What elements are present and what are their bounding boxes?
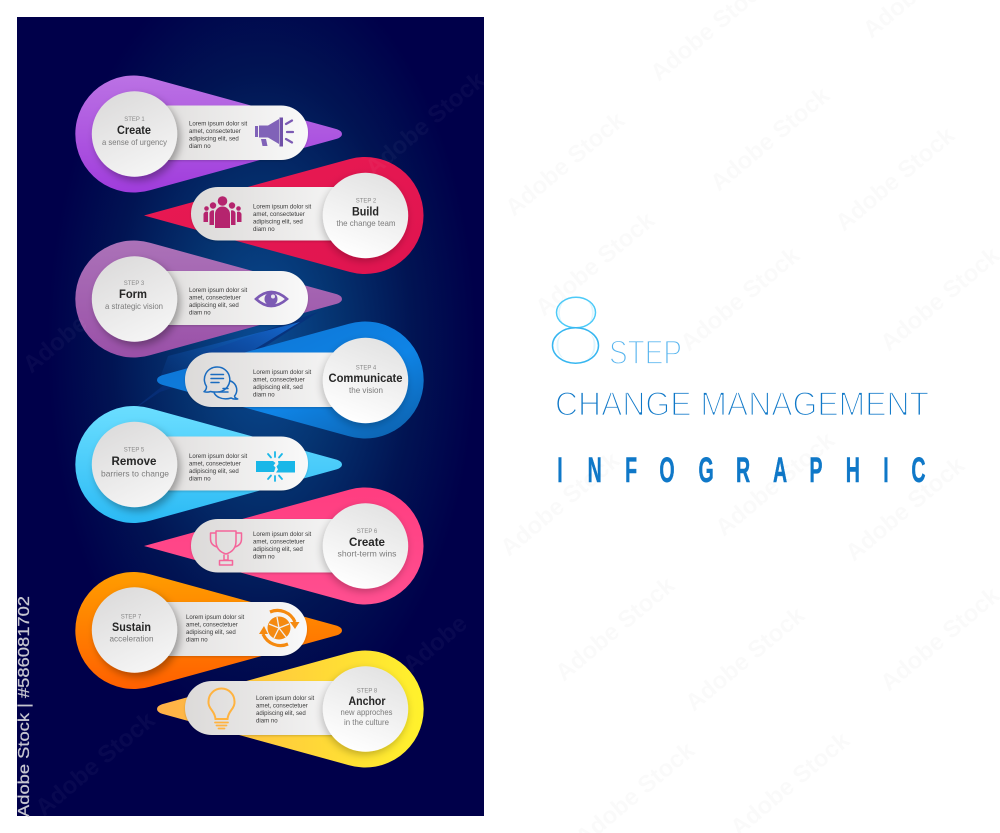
title INFOGRAPHIC: INFOGRAPHIC [557, 451, 925, 491]
description: amet, consectetuer [189, 460, 241, 468]
description: Lorem ipsum dolor sit [189, 287, 248, 294]
circle [92, 91, 177, 177]
teardrop [144, 488, 424, 605]
subheading: a strategic vision [105, 301, 163, 311]
step label: STEP 1 [124, 117, 145, 123]
step 5: remove barriers to change [75, 406, 342, 523]
pill [134, 271, 308, 325]
description: diam no [253, 554, 275, 560]
teardrop [144, 157, 424, 274]
description: Lorem ipsum dolor sit [186, 614, 245, 621]
step label: STEP 8 [357, 688, 378, 694]
description: amet, consectetuer [189, 294, 241, 302]
pill [191, 519, 365, 572]
description: Lorem ipsum dolor sit [256, 695, 315, 702]
description: amet, consectetuer [189, 128, 241, 135]
pill [191, 187, 365, 240]
icon: light bulb [208, 688, 235, 728]
pill [134, 436, 308, 490]
heading: Sustain [112, 622, 151, 634]
description: adipiscing elit, sed [189, 302, 239, 309]
description: adipiscing elit, sed [253, 218, 303, 226]
subheading: acceleration [110, 634, 154, 644]
teardrop [157, 322, 424, 438]
icon: chat bubbles [204, 367, 238, 399]
heading: Build [352, 206, 379, 218]
step label: STEP 2 [356, 198, 377, 204]
step 1: create a sense of urgency [75, 76, 342, 192]
description: diam no [253, 392, 275, 398]
circle [323, 173, 408, 258]
subheading: barriers to change [101, 468, 169, 478]
pill [185, 352, 365, 407]
circle [323, 338, 408, 423]
subheading line 1: new approches [340, 707, 392, 717]
circle [323, 666, 408, 752]
step 7: sustain acceleration [75, 572, 342, 689]
description: adipiscing elit, sed [186, 629, 236, 636]
description: Lorem ipsum dolor sit [253, 369, 312, 376]
heading: Create [349, 537, 385, 549]
description: Lorem ipsum dolor sit [189, 453, 248, 460]
description: diam no [189, 310, 211, 316]
title CHANGE MANAGEMENT: CHANGE MANAGEMENT [555, 386, 929, 424]
teardrop [75, 406, 342, 523]
description: diam no [189, 476, 211, 482]
circle [92, 587, 177, 673]
description: amet, consectetuer [186, 622, 238, 628]
circle [92, 256, 177, 342]
subheading: the change team [336, 218, 396, 228]
step label: STEP 6 [357, 529, 378, 535]
icon: eye [256, 292, 287, 306]
description: adipiscing elit, sed [253, 384, 303, 391]
icon: trophy [210, 531, 242, 565]
circle [323, 503, 408, 589]
icon: turbine with arrows [259, 610, 300, 646]
vertical credit text: Adobe Stock | #586081702 [16, 596, 33, 817]
teardrop [75, 76, 342, 192]
step label: STEP 5 [124, 448, 145, 454]
teardrop [75, 572, 342, 689]
watermark texts: Adobe Stock [30, 706, 161, 822]
description: amet, consectetuer [253, 538, 305, 546]
heading: Form [119, 289, 147, 301]
watermark texts: Adobe [18, 310, 92, 379]
subheading line 2: in the culture [344, 717, 389, 727]
description: adipiscing elit, sed [256, 710, 306, 717]
description: Lorem ipsum dolor sit [189, 120, 248, 128]
description: diam no [186, 636, 208, 644]
teardrop [75, 240, 342, 358]
step 2: build the change team [144, 157, 424, 274]
step 8: anchor new approaches in the culture [157, 650, 424, 768]
step label: STEP 3 [124, 281, 145, 287]
dark background panel [17, 17, 484, 816]
description: amet, consectetuer [253, 211, 305, 218]
watermark texts: Adobe Stock [360, 66, 491, 182]
title numeral 8: 8 [549, 275, 603, 385]
icon: broken barrier [256, 452, 295, 481]
pill [134, 106, 308, 160]
step label: STEP 4 [356, 366, 377, 372]
description: adipiscing elit, sed [189, 468, 239, 475]
icon: megaphone [255, 118, 293, 146]
description: amet, consectetuer [256, 702, 308, 710]
pill [185, 681, 365, 735]
teardrop [157, 650, 424, 768]
description: diam no [256, 718, 278, 724]
title word STEP: STEP [609, 334, 682, 372]
heading: Remove [112, 456, 156, 468]
circle [92, 422, 177, 507]
step 6: create short-term wins [144, 488, 424, 605]
heading: Communicate [328, 373, 402, 385]
description: adipiscing elit, sed [189, 136, 239, 142]
step 3: form a strategic vision [75, 240, 342, 358]
subheading: short-term wins [338, 548, 396, 558]
subheading: the vision [349, 385, 383, 395]
step label: STEP 7 [121, 614, 142, 620]
description: Lorem ipsum dolor sit [253, 531, 312, 538]
subheading: a sense of urgency [102, 137, 168, 147]
step 4: communicate the vision [157, 322, 424, 438]
description: diam no [253, 226, 275, 233]
description: adipiscing elit, sed [253, 546, 303, 553]
description: diam no [189, 143, 211, 150]
description: amet, consectetuer [253, 376, 305, 384]
watermark texts: Adobe [398, 610, 472, 679]
heading: Create [117, 125, 151, 137]
icon: team [203, 196, 242, 228]
description: Lorem ipsum dolor sit [253, 204, 312, 210]
pill [134, 602, 307, 656]
heading: Anchor [348, 696, 386, 708]
